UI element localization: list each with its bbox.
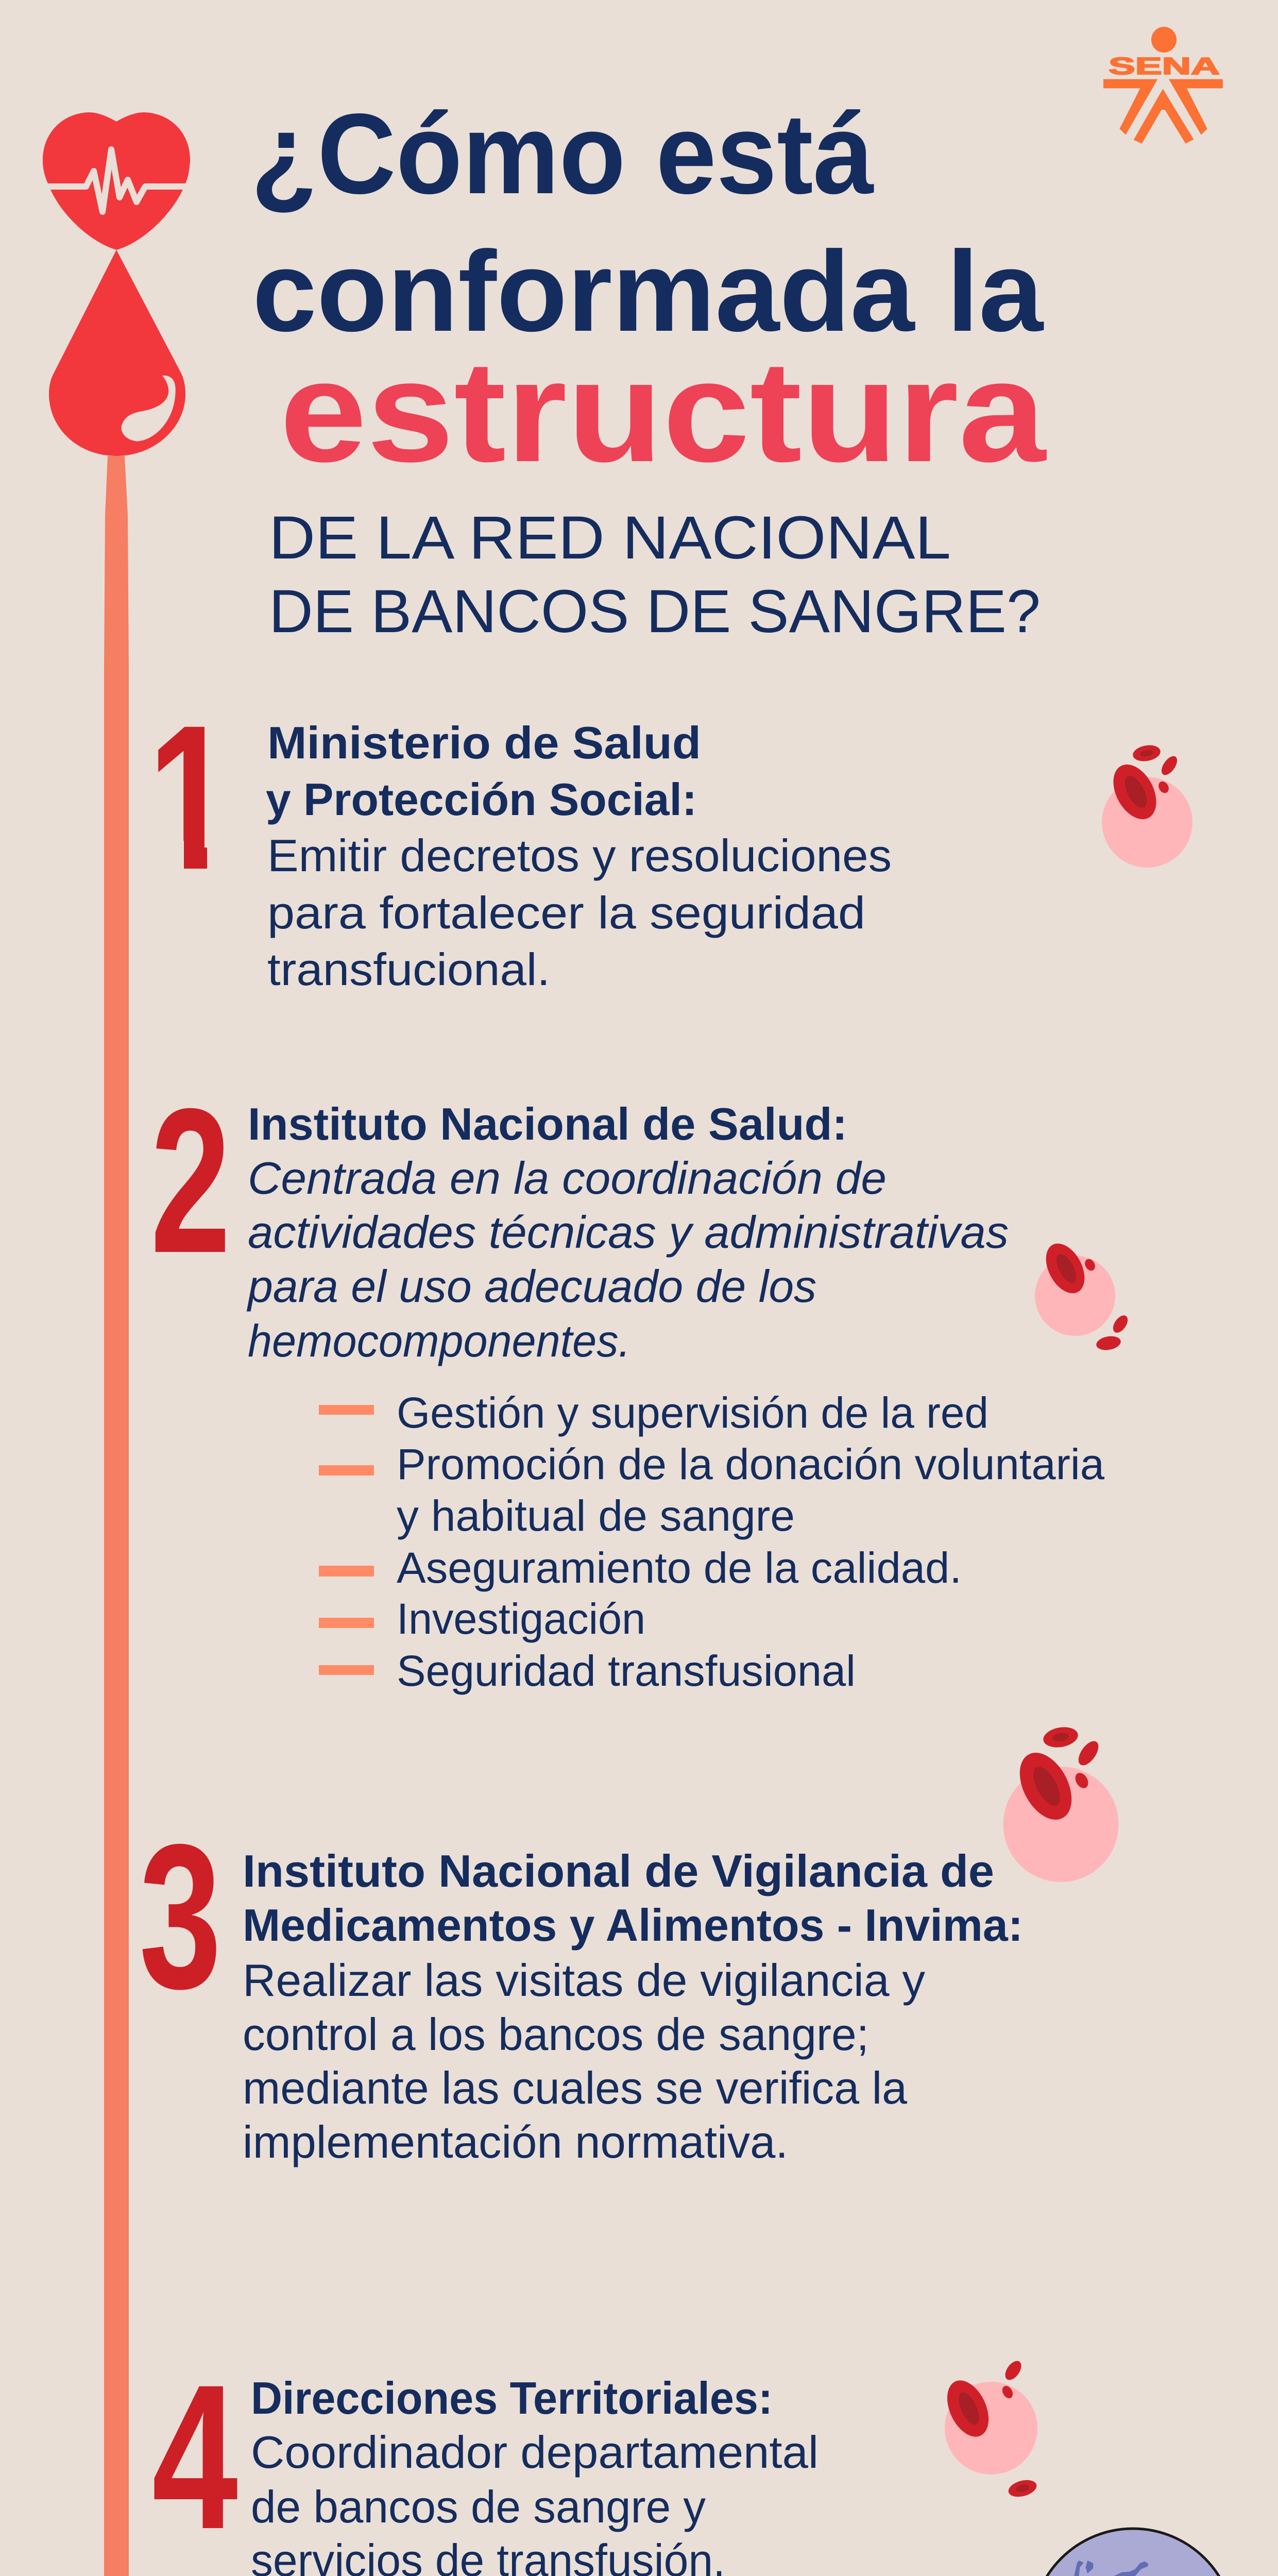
list: functions of the institute: Promoción de la donación voluntaria	[397, 1440, 1104, 1488]
text block: Ministerio de Salud: y Protección Social:	[266, 774, 697, 825]
title: conformada la	[252, 228, 1044, 355]
list: functions of the institute: Investigación	[397, 1595, 645, 1643]
number 1: 1	[148, 682, 233, 912]
text block: Invima: Medicamentos y Alimentos - Invima:	[243, 1900, 1023, 1951]
icon: blood cells 1	[1102, 743, 1192, 868]
title: estructura	[280, 331, 1047, 492]
icon: blood drop	[49, 250, 185, 456]
text block: Ministerio de Salud	[266, 717, 892, 995]
text block: Direcciones Territoriales: de bancos de sangre y	[251, 2481, 706, 2532]
text block: Ministerio de Salud: transfucional.	[267, 944, 550, 995]
number 3: 3	[139, 1801, 221, 2031]
text block: Direcciones Territoriales	[251, 2372, 819, 2576]
text block: Invima	[243, 1845, 1023, 2167]
subtitle: DE LA RED NACIONAL	[269, 504, 951, 572]
number 4: 4	[152, 2342, 239, 2572]
list: functions of the institute: Aseguramiento de la calidad.	[397, 1544, 962, 1592]
number 2: 2	[150, 1065, 231, 1296]
logo: SENA	[1103, 27, 1223, 144]
text block: Direcciones Territoriales: Direcciones Territoriales:	[251, 2372, 773, 2424]
list: functions of the institute: Seguridad transfusional	[397, 1647, 856, 1695]
list: functions of the institute: y habitual de sangre	[397, 1492, 795, 1540]
text block: Instituto Nacional de Salud: para el uso adecuado de los	[246, 1261, 816, 1312]
tube: blood line from drop to arm	[104, 456, 511, 2576]
text block: Direcciones Territoriales: Coordinador departamental	[251, 2427, 819, 2478]
text block: Ministerio de Salud: Ministerio de Salud	[267, 717, 701, 768]
icon: blood cells 2	[1035, 1237, 1131, 1352]
text block: Instituto Nacional de Salud: Instituto Nacional de Salud:	[248, 1098, 847, 1149]
text block: Invima: Realizar las visitas de vigilancia y	[243, 1955, 925, 2006]
text block: Invima: implementación normativa.	[243, 2116, 788, 2167]
text block: Instituto Nacional de Salud: hemocomponentes.	[248, 1315, 631, 1366]
text block: Invima: mediante las cuales se verifica la	[243, 2062, 907, 2113]
text block: Instituto Nacional de Salud: Centrada en la coordinación de	[248, 1153, 887, 1204]
subtitle: DE BANCOS DE SANGRE?	[269, 578, 1041, 646]
text block: Instituto Nacional de Salud: actividades técnicas y administrativas	[248, 1207, 1009, 1258]
logo: SENA: SENA	[1109, 53, 1220, 79]
list: functions of the institute	[319, 1388, 1104, 1695]
icon: blood cells 4	[939, 2358, 1038, 2500]
icon: heart with pulse line	[43, 112, 190, 250]
icon: blood cells 3	[1003, 1724, 1119, 1882]
list: functions of the institute: Gestión y supervisión de la red	[397, 1388, 989, 1437]
text block: Invima: Instituto Nacional de Vigilancia de	[243, 1845, 994, 1896]
title: ¿Cómo está	[251, 90, 874, 218]
text block: Invima: control a los bancos de sangre;	[243, 2009, 869, 2060]
title	[251, 90, 1047, 492]
icon: map of Colombia in circle	[1031, 2529, 1234, 2576]
text block: Ministerio de Salud: para fortalecer la seguridad	[267, 887, 865, 938]
subtitle	[269, 504, 1041, 646]
text block: Instituto Nacional de Salud	[246, 1098, 1009, 1366]
text block: Ministerio de Salud: Emitir decretos y resoluciones	[267, 830, 892, 881]
